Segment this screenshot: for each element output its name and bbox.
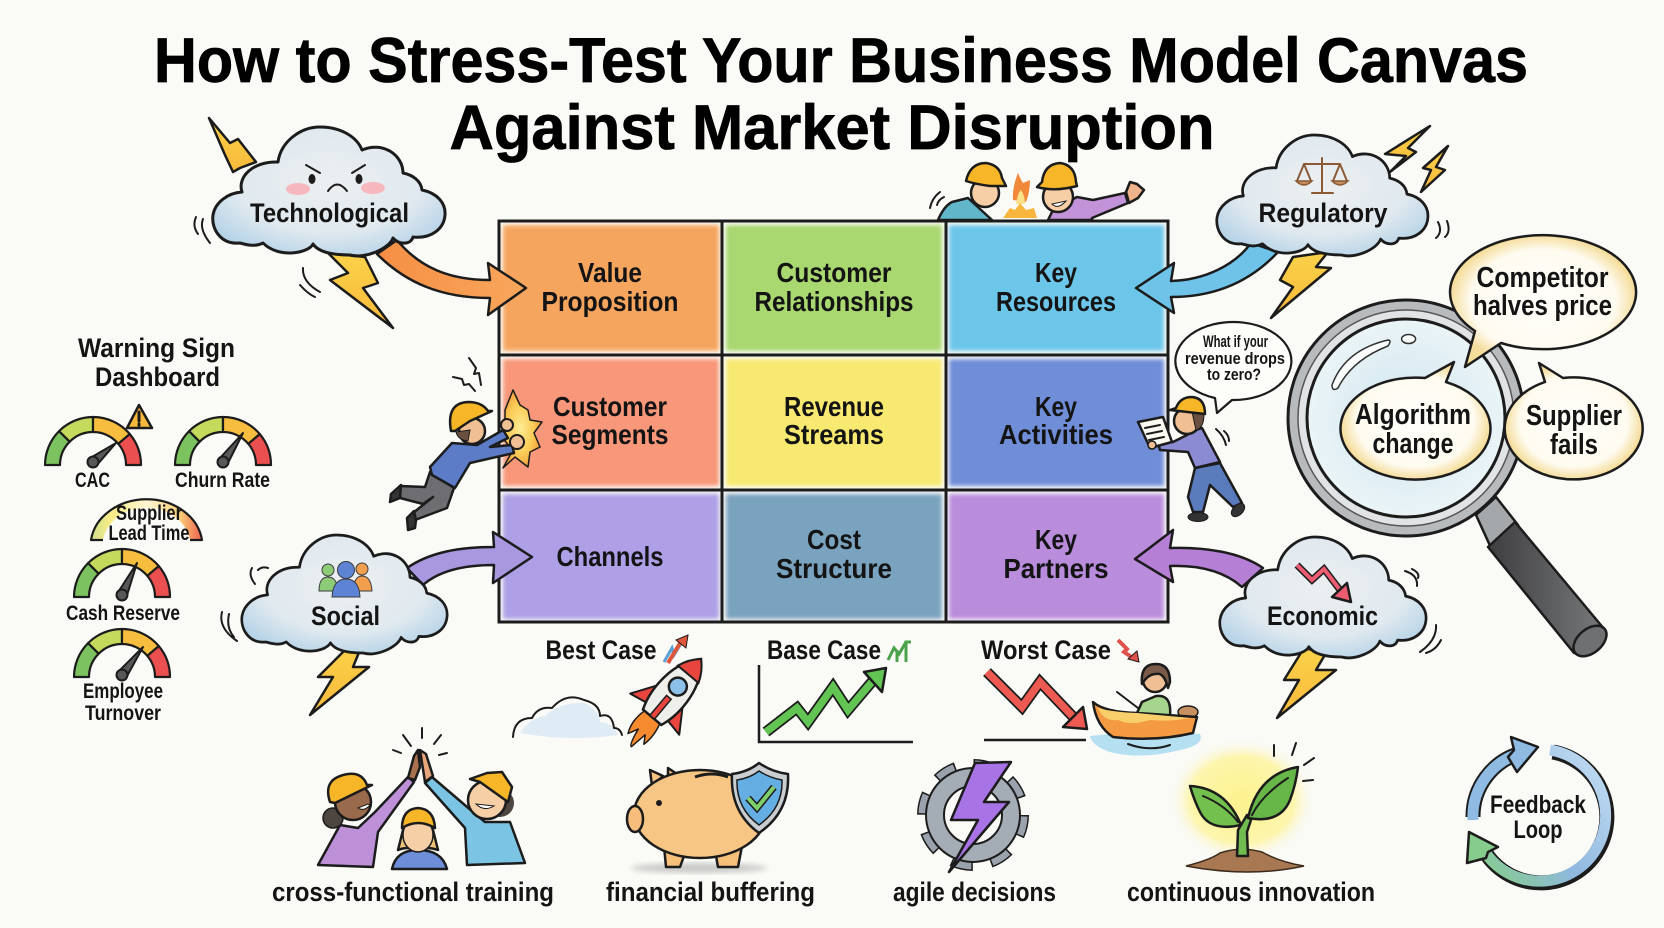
callout: algorithm change: Algorithm <box>1355 399 1471 431</box>
callout: algorithm change <box>1340 362 1490 480</box>
icon: cloud puffs <box>513 697 622 738</box>
panel: business model canvas grid: Value <box>578 257 642 288</box>
panel: business model canvas grid: Cost <box>807 524 861 555</box>
strategy: cross-functional training: cross-functional training <box>272 877 554 907</box>
panel: business model canvas grid: Activities <box>999 419 1113 450</box>
cloud: regulatory <box>1217 126 1449 318</box>
feedback loop: Feedback <box>1490 791 1586 819</box>
icon: gear <box>924 766 1022 864</box>
cloud: economic: Economic <box>1267 601 1378 631</box>
icon: soil mound <box>1186 849 1304 872</box>
scenario: worst case: Worst Case <box>981 635 1111 665</box>
gauge: CAC: CAC <box>75 469 110 492</box>
arrow: regulatory to key resources <box>1136 243 1278 313</box>
cloud: technological: Technological <box>250 198 409 228</box>
panel: business model canvas grid: Key <box>1035 257 1077 288</box>
arrow: technological to value proposition <box>377 240 526 315</box>
callout: competitor halves price: halves price <box>1473 290 1612 322</box>
panel: business model canvas grid: Channels <box>556 541 664 572</box>
cloud: economic <box>1220 537 1441 718</box>
gauge: supplier lead time: Supplier <box>116 502 182 525</box>
strategy: financial buffering <box>606 763 815 907</box>
scenario: worst case <box>981 635 1201 756</box>
icon: sprout <box>1190 767 1298 856</box>
panel: business model canvas grid: Relationships <box>754 286 914 317</box>
panel: business model canvas grid: Customer <box>553 391 667 422</box>
cloud: social: Social <box>311 601 380 631</box>
magnifying glass <box>1288 300 1612 662</box>
strategy: agile decisions: agile decisions <box>893 877 1056 907</box>
icon: small up arrow <box>664 635 688 663</box>
panel: business model canvas grid: Key <box>1035 524 1077 555</box>
gauge: employee turnover: Employee <box>83 680 163 703</box>
gauge: churn rate: Churn Rate <box>175 469 270 492</box>
gauge: cash reserve: Cash Reserve <box>66 602 180 625</box>
panel: business model canvas grid: Partners <box>1004 553 1108 584</box>
icon: warning triangle <box>127 405 152 428</box>
heading: warning sign dashboard <box>78 333 235 392</box>
heading: warning sign dashboard: Warning Sign <box>78 333 235 363</box>
woman with hard hat <box>318 750 420 867</box>
icon: small green chart <box>888 642 911 662</box>
icon: flame <box>1003 173 1037 218</box>
panel: business model canvas grid <box>499 221 1168 622</box>
cloud: regulatory: Regulatory <box>1258 198 1388 228</box>
callout: competitor halves price: Competitor <box>1476 262 1608 294</box>
arrow: social to channels <box>407 532 532 585</box>
gauge: cash reserve <box>66 549 180 625</box>
worker pushing customer segments <box>390 358 542 530</box>
strategy: continuous innovation: continuous innovation <box>1127 877 1375 907</box>
callout: algorithm change: change <box>1372 428 1454 460</box>
icon: rocket <box>604 638 726 765</box>
icon: person in boat <box>1090 664 1201 756</box>
gauge: CAC <box>45 417 141 492</box>
strategy: continuous innovation <box>1127 738 1375 907</box>
callout: competitor halves price <box>1450 235 1636 367</box>
panel: warning sign dashboard <box>45 333 271 725</box>
feedback loop <box>1467 737 1607 883</box>
panel: business model canvas grid: Segments <box>552 419 668 450</box>
callout: supplier fails <box>1505 363 1643 479</box>
panel: business model canvas grid: Resources <box>996 286 1116 317</box>
callout: supplier fails: Supplier <box>1526 400 1622 432</box>
icon: small red arrow <box>1118 640 1139 662</box>
icon: piggy bank <box>627 768 766 867</box>
gauge: employee turnover <box>74 629 170 725</box>
child with hard hat <box>392 808 447 869</box>
feedback loop: Loop <box>1514 816 1562 844</box>
title <box>154 26 1528 163</box>
title: Against Market Disruption <box>450 93 1214 163</box>
chart: falling line <box>984 672 1087 740</box>
cloud: technological <box>194 118 445 328</box>
icon: people <box>319 562 372 597</box>
cloud: social <box>221 535 447 715</box>
gauge: churn rate <box>175 417 271 492</box>
title: How to Stress-Test Your Business Model Canvas <box>154 26 1528 96</box>
icon: impact starburst <box>503 390 542 468</box>
scenario: base case <box>759 635 913 742</box>
arrow: economic to key partners <box>1135 530 1263 587</box>
scenario: base case: Base Case <box>767 635 881 665</box>
chart: rising line <box>759 665 913 742</box>
icon: lightning bolt <box>949 762 1011 872</box>
worker with clipboard and speech bubble <box>1138 322 1291 522</box>
strategy: cross-functional training <box>272 728 554 907</box>
icon: sparks <box>453 358 481 391</box>
panel: business model canvas grid: Revenue <box>784 391 884 422</box>
icon: shield with check <box>732 763 788 833</box>
icon: scales of justice <box>1296 158 1348 193</box>
callout: what if revenue drops to zero: What if your <box>1203 332 1268 351</box>
panel: business model canvas grid: Proposition <box>542 286 678 317</box>
icon: falling red arrow <box>1297 565 1351 602</box>
scenario: best case: Best Case <box>546 635 656 665</box>
gauge: supplier lead time: Lead Time <box>108 522 190 545</box>
panel: business model canvas grid: Streams <box>784 419 884 450</box>
callout: supplier fails: fails <box>1550 429 1598 461</box>
callout: what if revenue drops to zero <box>1175 322 1291 413</box>
panel: business model canvas grid: Key <box>1035 391 1077 422</box>
gauge: employee turnover: Turnover <box>85 702 161 725</box>
panel: business model canvas grid: Structure <box>776 553 892 584</box>
man with hard hat <box>420 750 525 865</box>
strategy: agile decisions <box>893 762 1056 907</box>
gauge: supplier lead time <box>91 499 202 545</box>
panel: business model canvas grid: Customer <box>776 257 892 288</box>
strategy: financial buffering: financial buffering <box>606 877 815 907</box>
callout: what if revenue drops to zero: revenue drops <box>1185 349 1285 368</box>
scenario: best case <box>513 635 726 765</box>
heading: warning sign dashboard: Dashboard <box>95 362 220 392</box>
workers on top of grid <box>930 163 1144 220</box>
callout: what if revenue drops to zero: to zero? <box>1207 365 1261 384</box>
